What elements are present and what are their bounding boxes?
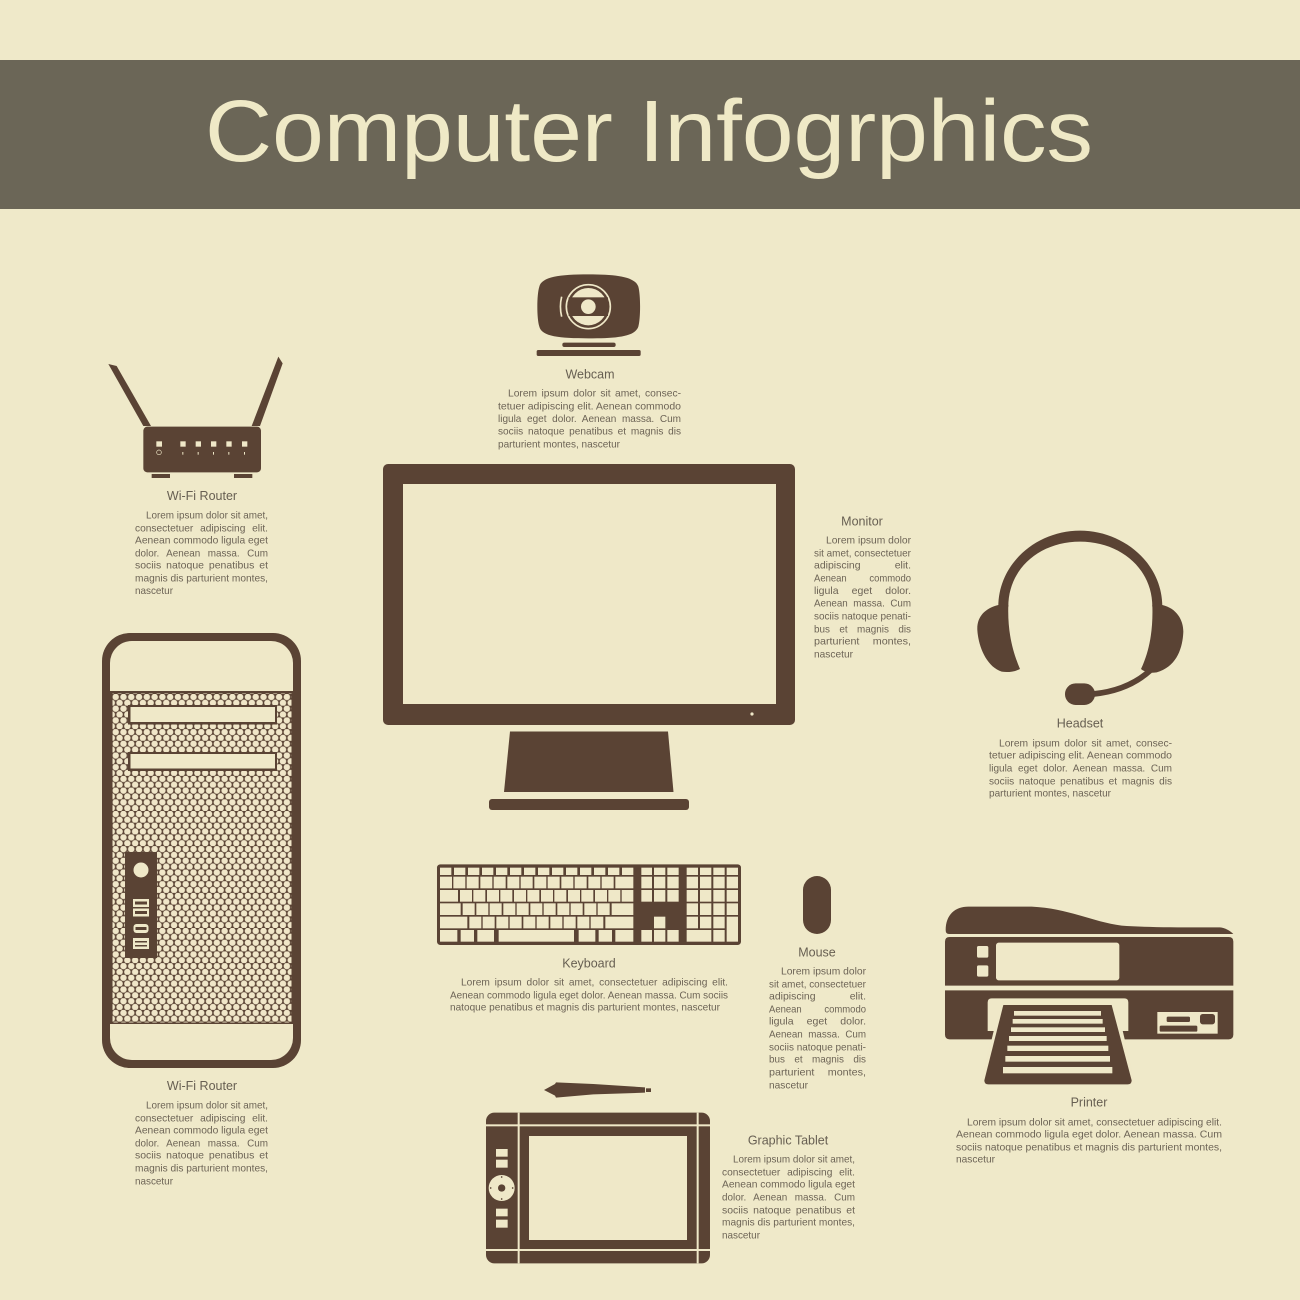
text: tablet description: sociis natoque penatibus et [722,1206,855,1216]
text: monitor description: Aenean commodo [814,574,911,584]
text: router description: Aenean commodo ligula eget [135,536,268,546]
text: keyboard description [450,978,728,1014]
text: webcam description: tetuer adipiscing elit. Aenean commodo [498,402,681,412]
text: tower description: consectetuer adipiscing elit. [135,1114,268,1124]
text: monitor description: Aenean massa. Cum [814,598,911,610]
icon: webcam [537,274,641,356]
text: monitor description: parturient montes, [814,636,911,648]
panel: headset [977,531,1183,800]
text: tablet description: Aenean commodo ligula eget [722,1180,855,1190]
heading: wi-fi router: Wi-Fi Router [167,489,237,503]
text: tablet description: nascetur [722,1230,761,1242]
text: webcam description [498,388,681,450]
text: router description: sociis natoque penatibus et [135,560,268,572]
text: mouse description: Aenean commodo [769,1004,866,1016]
text: tablet description [722,1154,855,1242]
panel: webcam [498,274,681,450]
text: mouse description: sociis natoque penati- [769,1042,866,1054]
text: tablet description: consectetuer adipiscing elit. [722,1168,855,1178]
text: monitor description: bus et magnis dis [814,624,911,636]
text: router description: Lorem ipsum dolor sit amet, [146,510,268,522]
text: tower description: magnis dis parturient montes, [135,1164,268,1174]
text: keyboard description: Aenean commodo ligula eget dolor. Aenean massa. Cum sociis [450,990,728,1002]
text: webcam description: Lorem ipsum dolor sit amet, consec- [508,388,681,400]
text: monitor description: nascetur [814,650,854,660]
icon: mouse [803,876,831,934]
heading: headset: Headset [1057,716,1104,730]
heading: mouse: Mouse [798,946,836,960]
text: mouse description: Aenean massa. Cum [769,1030,866,1040]
text: tablet description: dolor. Aenean massa. Cum [722,1192,855,1204]
text: mouse description [769,966,867,1092]
text: mouse description: ligula eget dolor. [769,1016,866,1028]
text: webcam description: parturient montes, nascetur [498,440,621,450]
text: printer description [956,1118,1222,1166]
text: tower description: sociis natoque penatibus et [135,1150,268,1162]
text: headset description: ligula eget dolor. Aenean massa. Cum [989,764,1172,774]
panel: printer [945,907,1233,1166]
panel: wi-fi router [108,357,283,597]
icon: graphic tablet and pen [486,1082,710,1263]
text: tower description: Aenean commodo ligula eget [135,1126,268,1136]
heading: monitor: Monitor [841,514,883,528]
text: router description: dolor. Aenean massa. Cum [135,548,268,560]
text: webcam description: ligula eget dolor. Aenean massa. Cum [498,414,681,425]
text: headset description: tetuer adipiscing elit. Aenean commodo [989,750,1172,762]
heading: tower: Wi-Fi Router [167,1079,237,1093]
text: tower description: Lorem ipsum dolor sit amet, [146,1100,268,1112]
text: mouse description: parturient montes, [769,1068,866,1078]
text: monitor description: adipiscing elit. [814,560,911,572]
panel: graphic tablet [486,1082,855,1263]
panel: keyboard [437,864,741,1014]
text: webcam description: sociis natoque penatibus et magnis dis [498,426,681,438]
text: tower description: nascetur [135,1176,174,1188]
text: printer description: Aenean commodo ligula eget dolor. Aenean massa. Cum [956,1130,1222,1140]
text: headset description: Lorem ipsum dolor sit amet, consec- [999,738,1172,750]
text: printer description: nascetur [956,1154,996,1166]
text: headset description: sociis natoque penatibus et magnis dis [989,776,1172,788]
text: monitor description: Lorem ipsum dolor [826,536,912,546]
heading: keyboard: Keyboard [562,956,616,970]
heading: printer: Printer [1071,1096,1107,1110]
text: tablet description: Lorem ipsum dolor sit amet, [733,1154,855,1166]
text: keyboard description: natoque penatibus et magnis dis parturient montes, nascetur [450,1002,721,1014]
text: mouse description: nascetur [769,1080,809,1092]
text: headset description: parturient montes, nascetur [989,788,1112,800]
text: headset description [989,738,1172,800]
text: router description: consectetuer adipiscing elit. [135,524,268,534]
text: router description [135,510,268,597]
text: tablet description: magnis dis parturient montes, [722,1218,855,1228]
heading: graphic tablet: Graphic Tablet [748,1134,829,1148]
icon: router [108,357,283,478]
panel: monitor [383,464,912,810]
heading: webcam: Webcam [565,368,615,382]
text: router description: magnis dis parturient montes, [135,574,268,584]
text: tower description [135,1100,268,1188]
text: monitor description: ligula eget dolor. [814,586,911,597]
title: Computer Infogrphics [205,83,1093,180]
panel: computer tower [102,633,301,1188]
icon: printer [945,907,1233,1084]
icon: keyboard [437,864,741,945]
text: printer description: sociis natoque penatibus et magnis dis parturient montes, [956,1142,1222,1154]
title banner [0,60,1300,209]
text: router description: nascetur [135,586,174,597]
text: mouse description: bus et magnis dis [769,1054,866,1066]
text: monitor description [814,536,912,660]
icon: headset [977,531,1183,705]
panel: mouse [769,876,867,1092]
text: mouse description: sit amet, consectetuer [769,980,867,990]
text: printer description: Lorem ipsum dolor sit amet, consectetuer adipiscing elit. [967,1118,1222,1128]
icon: monitor [383,464,795,810]
text: mouse description: adipiscing elit. [769,992,866,1002]
icon: computer tower [102,633,301,1068]
text: monitor description: sit amet, consectetuer [814,548,912,560]
text: monitor description: sociis natoque penati- [814,612,911,622]
text: keyboard description: Lorem ipsum dolor sit amet, consectetuer adipiscing elit. [461,978,728,988]
text: tower description: dolor. Aenean massa. Cum [135,1138,268,1150]
text: mouse description: Lorem ipsum dolor [781,966,867,978]
